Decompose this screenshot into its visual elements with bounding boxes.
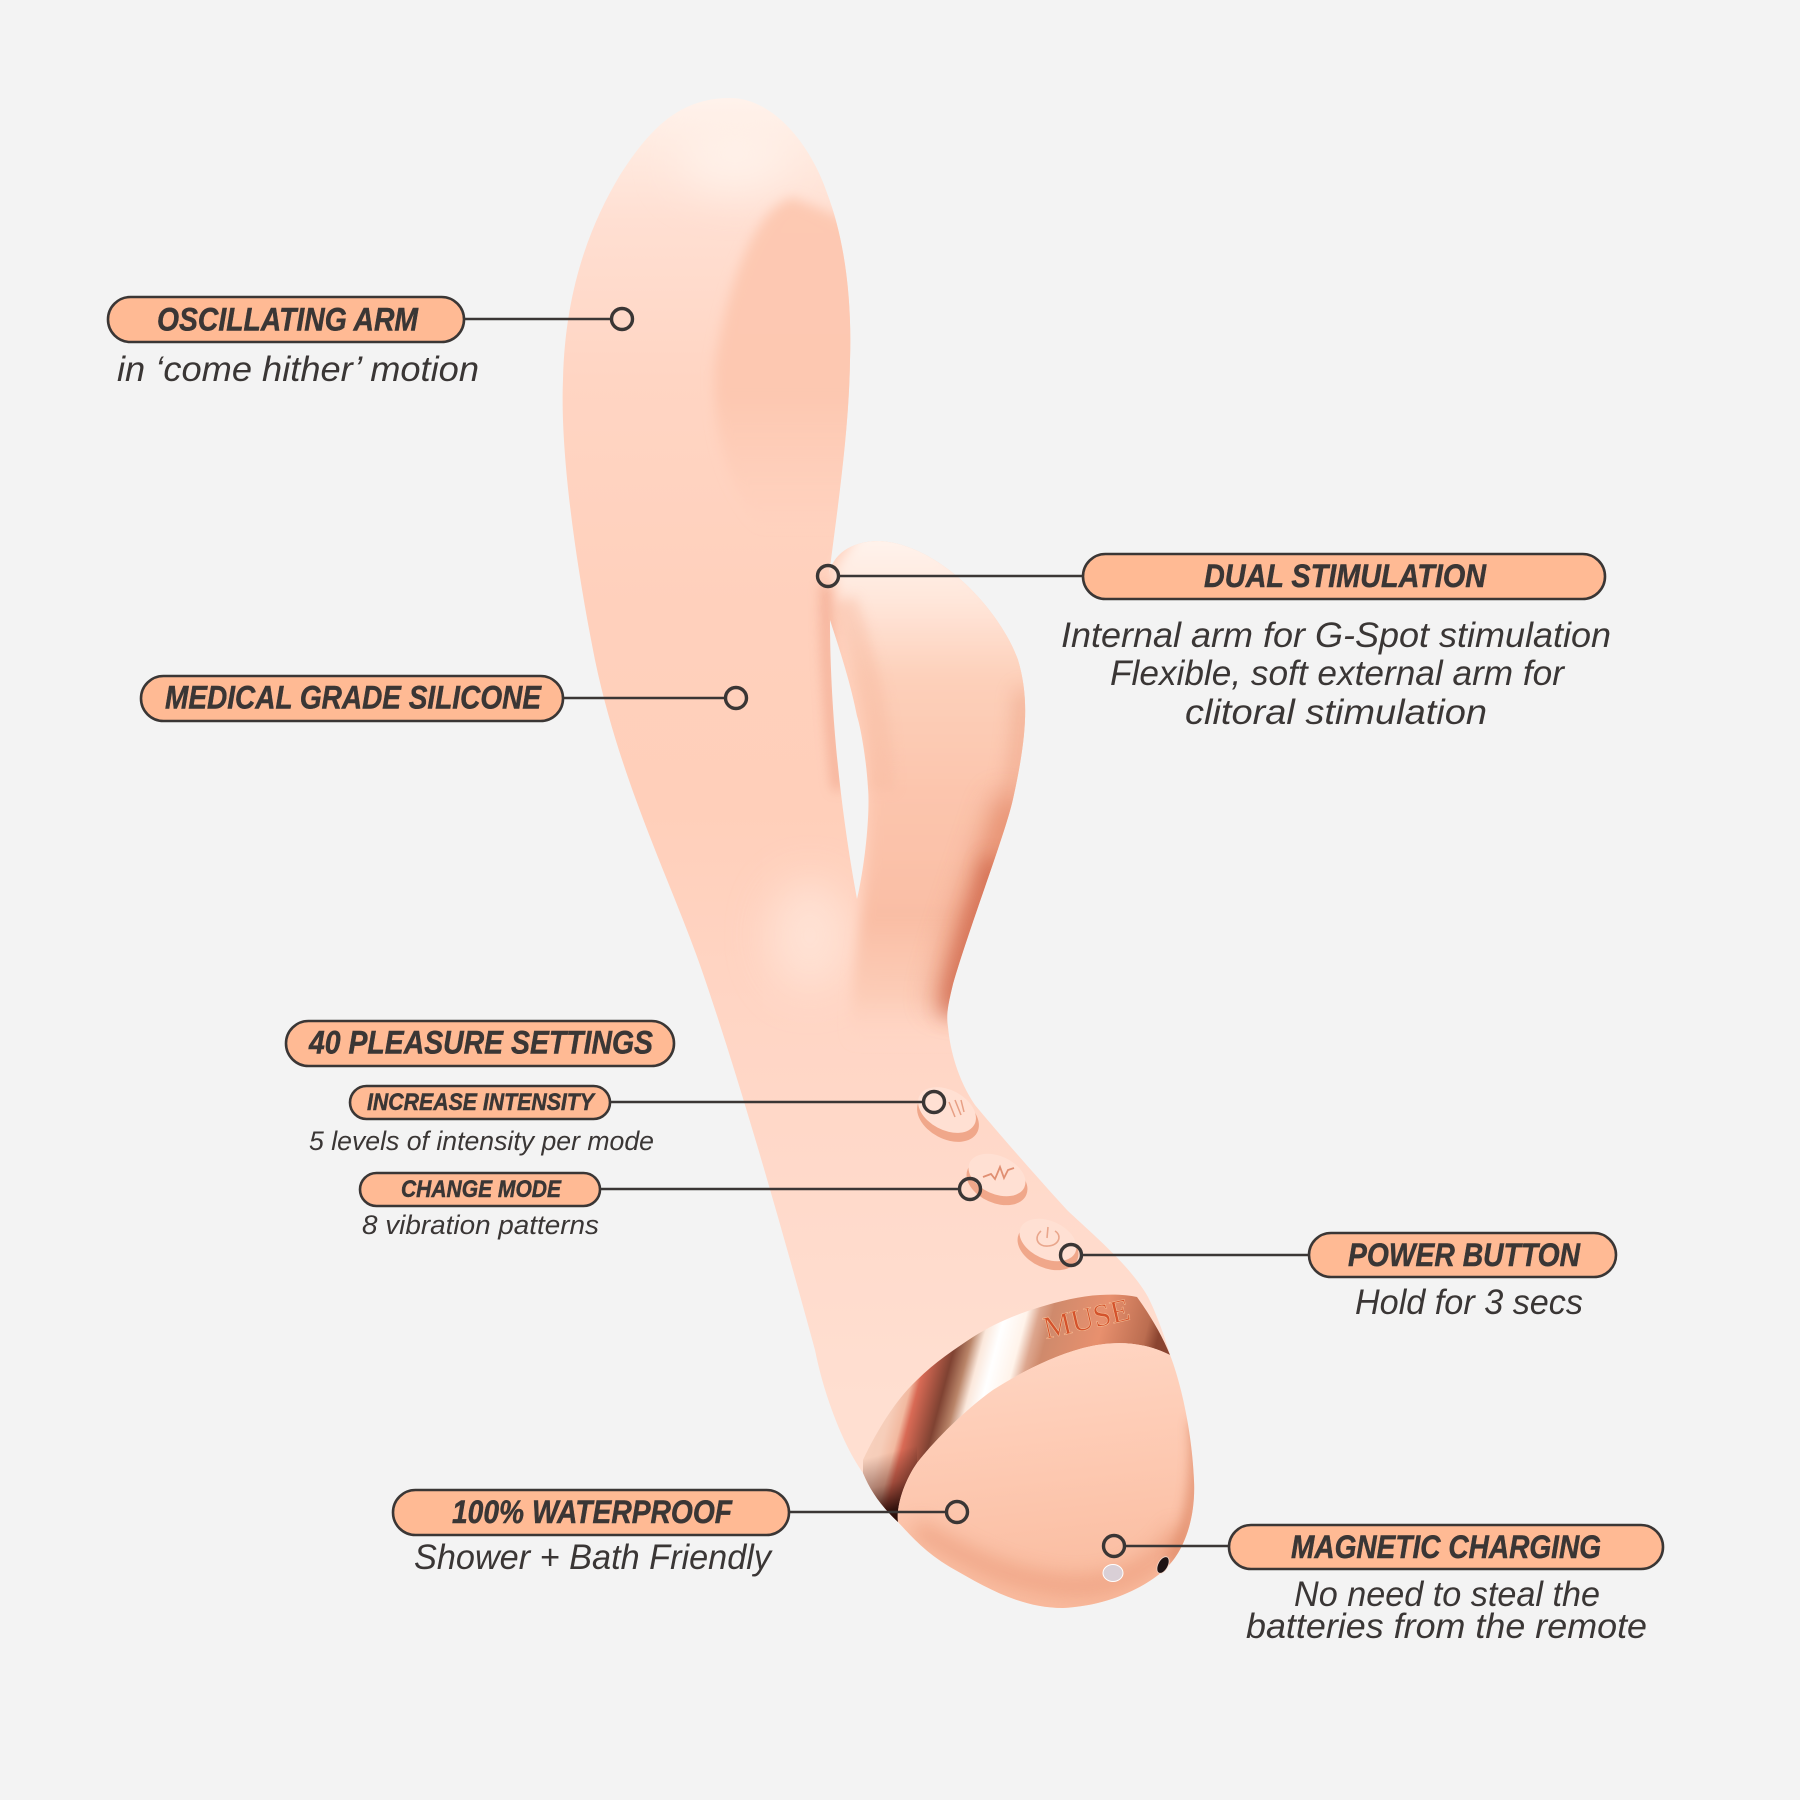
gap between arms — [830, 620, 869, 899]
callout: oscillating arm: in ‘come hither’ motion — [117, 350, 479, 389]
control button: intensity — [909, 1078, 987, 1152]
control button: mode — [959, 1145, 1035, 1214]
callout: change mode: CHANGE MODE — [401, 1176, 562, 1203]
heading: 40 pleasure settings: 40 PLEASURE SETTINGS — [308, 1024, 654, 1060]
callout: magnetic charging: batteries from the remote — [1246, 1607, 1647, 1646]
charging pin: silver — [1103, 1564, 1123, 1582]
callout: magnetic charging: MAGNETIC CHARGING — [1291, 1529, 1601, 1565]
callout: increase intensity: 5 levels of intensity per mode — [309, 1126, 654, 1156]
body shading — [680, 120, 1060, 1045]
callout: power button: POWER BUTTON — [1348, 1237, 1581, 1273]
product illustration — [563, 98, 1197, 1608]
callout: waterproof: 100% WATERPROOF — [452, 1494, 733, 1530]
callout: medical grade silicone — [141, 676, 746, 721]
callout: increase intensity: INCREASE INTENSITY — [367, 1089, 596, 1116]
metal band — [863, 1291, 1170, 1522]
callout: magnetic charging: No need to steal the — [1294, 1575, 1600, 1614]
callout: dual stimulation: Flexible, soft external arm for — [1110, 654, 1565, 693]
callout: oscillating arm: OSCILLATING ARM — [157, 302, 419, 338]
callout: power button: Hold for 3 secs — [1355, 1283, 1583, 1322]
callout: dual stimulation: Internal arm for G-Spot stimulation — [1061, 616, 1611, 655]
callout: dual stimulation — [818, 554, 1611, 732]
body silhouette — [563, 98, 1194, 1608]
callout: dual stimulation: DUAL STIMULATION — [1204, 558, 1487, 594]
control button: power — [1010, 1210, 1086, 1279]
head — [898, 1343, 1197, 1608]
callout: dual stimulation: clitoral stimulation — [1185, 693, 1487, 732]
callout: waterproof — [393, 1490, 968, 1577]
charging pin: dark — [1154, 1555, 1172, 1575]
callout: oscillating arm — [108, 297, 632, 389]
callout: power button — [1060, 1233, 1616, 1322]
callout: increase intensity — [309, 1086, 944, 1156]
callout: medical grade silicone: MEDICAL GRADE SILICONE — [165, 680, 542, 716]
callout: waterproof: Shower + Bath Friendly — [414, 1538, 773, 1577]
brand mark: MUSE — [1039, 1291, 1133, 1346]
callout: magnetic charging — [1104, 1525, 1663, 1646]
callout: change mode: 8 vibration patterns — [362, 1210, 599, 1240]
callout: change mode — [360, 1173, 980, 1240]
